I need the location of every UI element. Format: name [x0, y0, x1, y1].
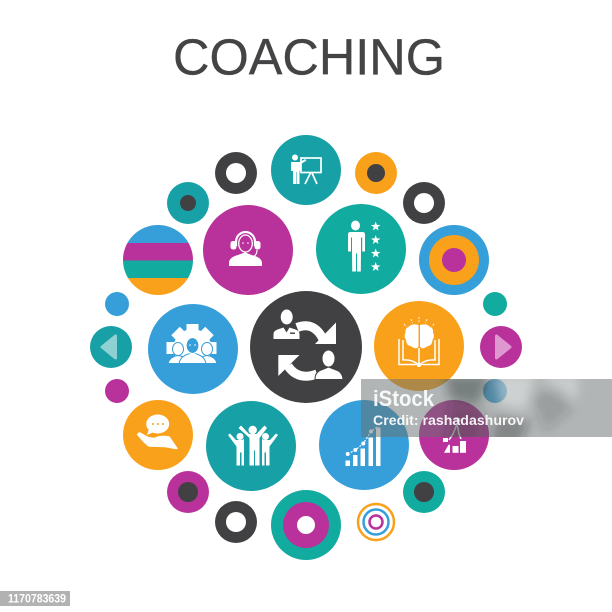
decorative dot: teal with dark centre bottom right	[403, 471, 445, 513]
decorative dot: magenta with dark centre	[167, 471, 209, 513]
watermark texture	[441, 379, 580, 437]
small magenta dot	[105, 379, 129, 403]
panel: presentation	[271, 135, 341, 205]
decorative dot: dark ring bottom left	[215, 501, 257, 543]
watermark banner	[361, 379, 612, 437]
decorative dot: teal with dark centre	[167, 182, 209, 224]
icon: coach and client with exchange arrows	[274, 310, 343, 380]
watermark logo: iStock	[373, 386, 435, 411]
icon: brain over open book	[399, 317, 439, 367]
panel: ratings	[316, 204, 406, 294]
small teal dot	[483, 292, 507, 316]
title: COACHING	[173, 28, 445, 86]
bottom concentric circle	[271, 490, 341, 560]
left arrow button	[90, 326, 132, 368]
decorative dot: orange with dark centre	[355, 152, 397, 194]
panel: team celebration	[206, 401, 296, 491]
small blue dot under watermark	[483, 379, 507, 403]
decorative dot: dark ring top left	[215, 152, 257, 194]
stock id label: 1170783639	[8, 594, 66, 606]
icon: person climbing steps	[443, 418, 466, 453]
panel: career steps	[419, 400, 489, 470]
icon: three people with raised arms	[228, 426, 278, 466]
stock id label	[0, 591, 70, 606]
small blue dot	[105, 292, 129, 316]
panel: feedback hand	[123, 400, 193, 470]
decorative dot: dark ring top right	[403, 182, 445, 224]
panel: team gear	[148, 304, 238, 394]
striped circle	[123, 225, 193, 295]
right arrow button	[480, 326, 522, 368]
icon: headset agent	[229, 232, 262, 266]
panel: support headset	[203, 205, 293, 295]
watermark credit: Credit: rashadashurov	[373, 412, 524, 428]
icon: rising bars with dotted trend line	[346, 426, 380, 466]
thin target circle	[358, 504, 394, 540]
icon: presenter at board	[291, 154, 321, 184]
panel: centre exchange	[250, 291, 362, 403]
icon: speech bubble over hand	[136, 414, 178, 449]
concentric target circle	[419, 225, 489, 295]
icon: person with stars	[348, 220, 381, 272]
panel: knowledge brain	[374, 301, 464, 391]
panel: growth chart	[319, 400, 409, 490]
icon: gear with three people	[166, 324, 216, 363]
